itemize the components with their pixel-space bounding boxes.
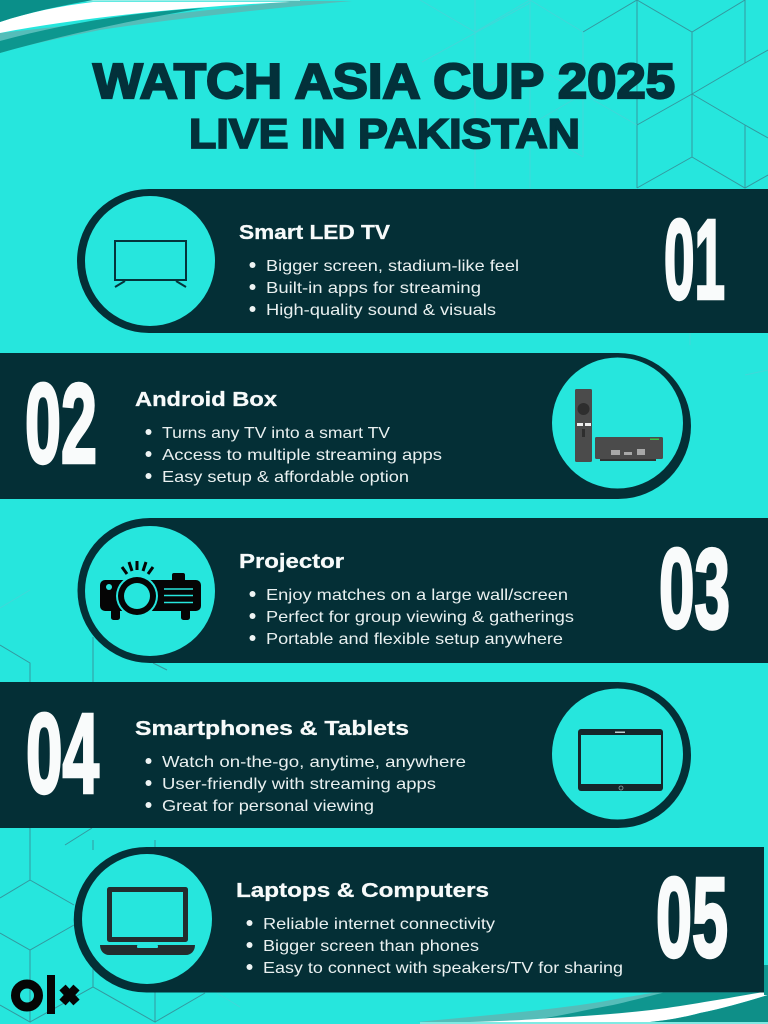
number 04: 04 (26, 690, 99, 816)
title line 2: LIVE IN PAKISTAN (189, 110, 580, 157)
panel: Projector (77, 518, 768, 663)
bottom-right corner swoosh (417, 965, 768, 1024)
heading: Smart LED TV: Smart LED TV (239, 221, 390, 244)
bullet list: Easy setup & affordable option (162, 469, 409, 486)
bullet list: Reliable internet connectivity (263, 916, 495, 933)
bullet list (250, 258, 519, 319)
bullet list: Easy to connect with speakers/TV for sharing (263, 960, 623, 977)
bullet list: Watch on-the-go, anytime, anywhere (162, 754, 466, 771)
bullet list: Turns any TV into a smart TV (162, 425, 390, 442)
bullet list: Portable and flexible setup anywhere (266, 631, 563, 648)
bullet list: User-friendly with streaming apps (162, 776, 436, 793)
bullet list (246, 916, 623, 977)
bullet list: Great for personal viewing (162, 798, 374, 815)
bullet list: Perfect for group viewing & gatherings (266, 609, 574, 626)
panel: Laptops & Computers (74, 847, 764, 992)
title line 1: WATCH ASIA CUP 2025 (93, 55, 675, 109)
bullet list (146, 425, 442, 486)
bullet list (250, 587, 574, 648)
icon: remote and android box (575, 389, 663, 462)
bullet list: Built-in apps for streaming (266, 280, 481, 297)
panel: Smartphones & Tablets (0, 682, 691, 828)
top-left corner swoosh (0, 0, 352, 53)
icon: TV (115, 241, 186, 287)
bullet list: Bigger screen, stadium-like feel (266, 258, 519, 275)
icon: laptop (100, 887, 195, 955)
bullet list: Bigger screen than phones (263, 938, 479, 955)
heading: Laptops & Computers: Laptops & Computers (236, 879, 489, 902)
OLX logo (16, 975, 76, 1014)
title (93, 55, 675, 157)
number 02: 02 (25, 360, 97, 486)
icon: tablet (578, 729, 663, 791)
panel: Android Box (0, 353, 691, 499)
heading: Android Box: Android Box (135, 388, 278, 411)
bullet list: High-quality sound & visuals (266, 302, 496, 319)
heading: Smartphones & Tablets: Smartphones & Tablets (135, 717, 409, 740)
icon: projector (100, 561, 201, 620)
bullet list (146, 754, 466, 815)
bullet list: Enjoy matches on a large wall/screen (266, 587, 568, 604)
heading: Projector: Projector (239, 550, 344, 573)
bullet list: Access to multiple streaming apps (162, 447, 442, 464)
panel: Smart LED TV (77, 189, 768, 333)
